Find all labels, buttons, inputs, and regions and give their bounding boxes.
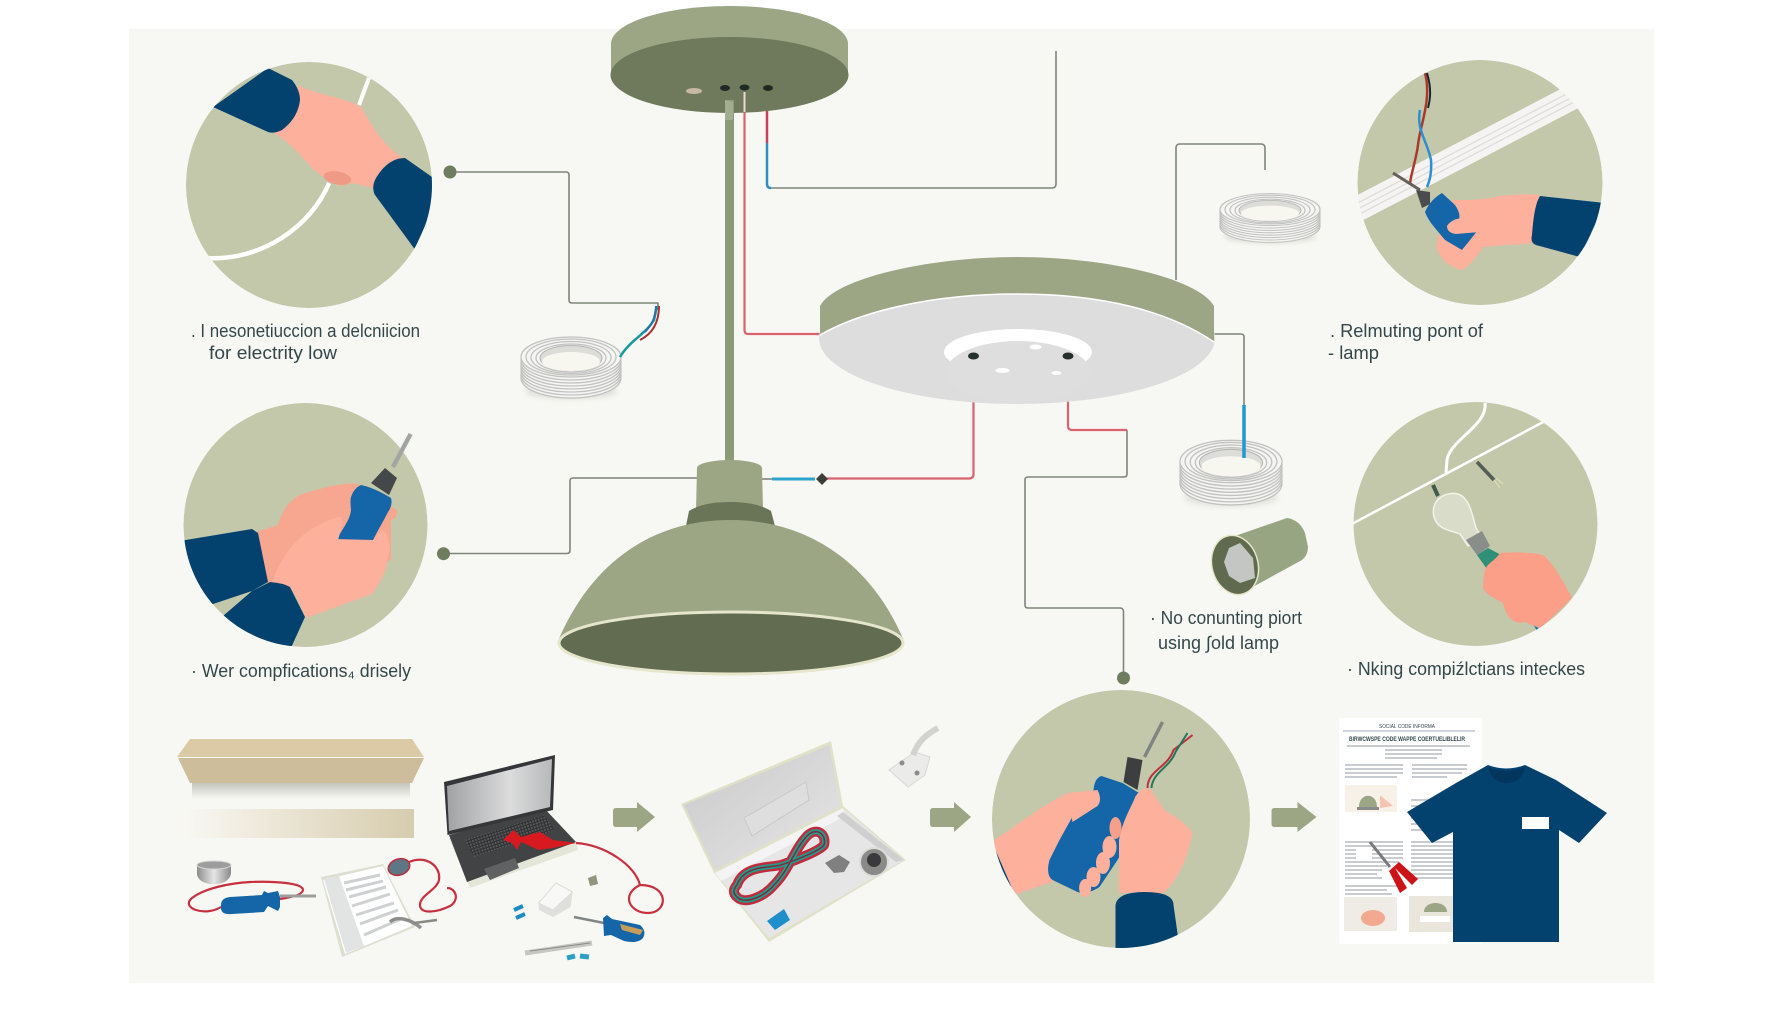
panel: screwdriver grip circle left (175, 403, 428, 650)
arrow: to kit (613, 802, 655, 832)
panel: manual page: BIRWCWSPE CODE WAPPE COERTUELIBLELIR (1349, 737, 1466, 743)
connector dots (437, 166, 1130, 684)
text: cylinder caption (1150, 608, 1302, 653)
icon: red cable to laptop (576, 843, 663, 913)
panel: bulb circle right (1350, 402, 1598, 646)
text: step four caption: · Nking compiźlctians inteckes (1347, 659, 1585, 679)
text: step two caption: · Wer compfications₄ drisely (191, 661, 411, 681)
text: step one caption (191, 321, 420, 363)
icon: lamp cylinder (1205, 518, 1308, 600)
panel: assembly circle bottom (992, 690, 1250, 950)
icon: coil of wire top right (1220, 194, 1320, 243)
icon: screwdriver with red cord (189, 882, 316, 914)
icon: red cable loop (386, 856, 456, 912)
icon: mounting bracket (889, 728, 938, 787)
ceiling canopy (610, 6, 848, 113)
icon: coil of wire with blue lead (1180, 405, 1282, 506)
background panel (129, 29, 1654, 983)
wiring connector lines (443, 51, 1265, 672)
text: step one caption: . I nesonetiuccion a delcniicion (191, 321, 420, 341)
text: step one caption: for electrity low (209, 343, 338, 363)
panel: wire cutting circle top right (1350, 60, 1605, 305)
panel: manual page: SOCIAL CODE INFORMA (1379, 724, 1436, 730)
panel: manual page (1339, 718, 1482, 944)
arrow: to manual (1272, 802, 1316, 832)
panel: hand circle top left (186, 62, 432, 308)
pendant lamp shade (558, 460, 904, 674)
text: cylinder caption: · No conunting piort (1150, 608, 1302, 628)
text: cylinder caption: using ∫old lamp (1158, 633, 1279, 653)
icon: small parts (514, 875, 644, 958)
icon: cardboard box (177, 739, 424, 799)
pendant rod (725, 92, 744, 461)
arrow: to drill (930, 802, 971, 832)
icon: navy t-shirt (1407, 765, 1607, 942)
text: step three caption: - lamp (1328, 343, 1379, 363)
text: step three caption: . Relmuting pont of (1330, 321, 1484, 341)
icon: metal bowl (197, 861, 231, 884)
icon: open parts box (681, 741, 906, 942)
icon: laptop (444, 755, 578, 888)
icon: instruction sheet (321, 864, 437, 957)
connector diamond (816, 473, 828, 485)
text: step three caption (1328, 321, 1484, 363)
icon: coil of wire left (521, 306, 659, 399)
ceiling disc fixture (819, 257, 1215, 404)
icon: packing strip (184, 809, 414, 838)
